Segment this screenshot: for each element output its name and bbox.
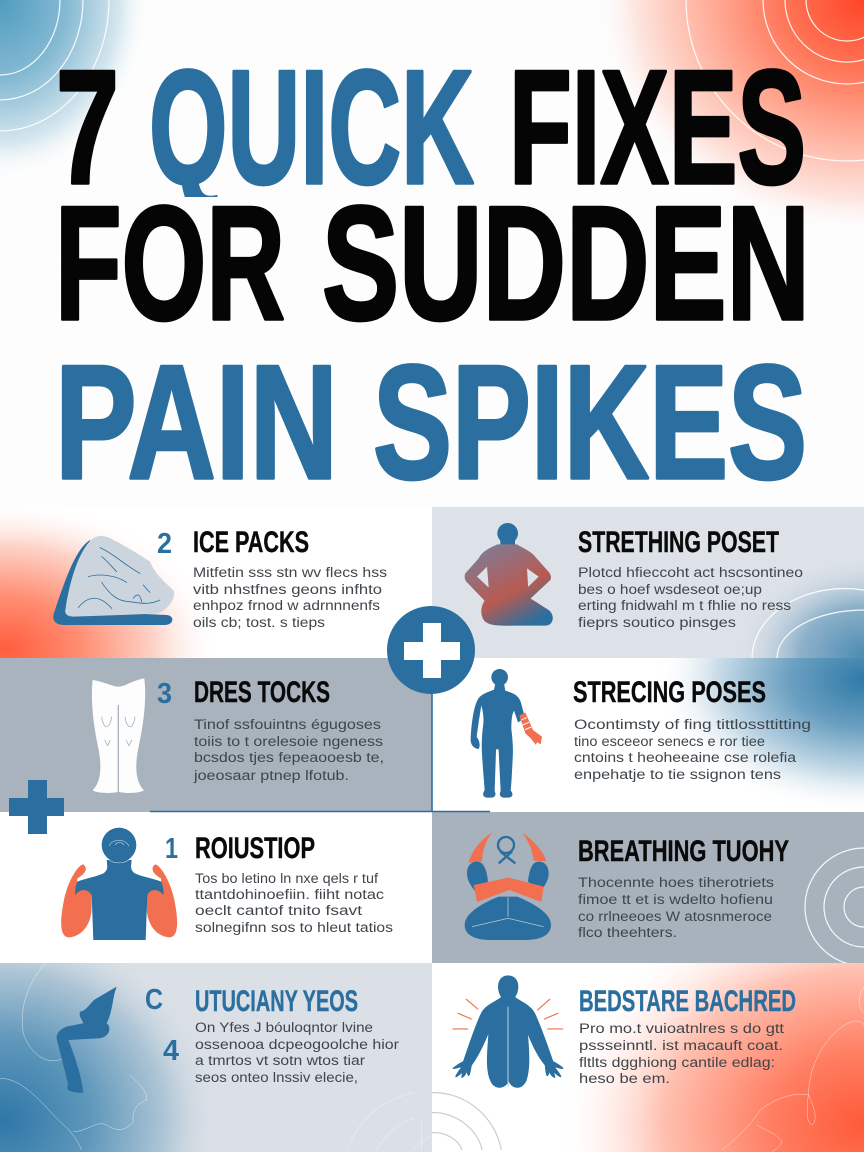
text block: Pro mo.t vuioatnlres s do gtt <box>579 1021 784 1036</box>
text block <box>578 565 803 630</box>
icon: small plus <box>9 780 64 834</box>
title: PAIN <box>55 332 338 513</box>
text block: ossenooa dcpeogoolche hior <box>195 1037 400 1052</box>
text block: cntoins t heoheeaine cse rolefia <box>574 750 797 765</box>
number: 1 <box>165 833 178 865</box>
number: 3 <box>157 678 172 710</box>
heading: ICE PACKS <box>193 526 309 559</box>
text block: Plotcd hfieccoht act hscsontineo <box>578 565 803 580</box>
panel: dres tocks <box>0 658 432 812</box>
panel: breathing tuohy <box>432 812 864 966</box>
icon: yoga pose <box>57 987 117 1093</box>
icon: breathing pose <box>465 833 551 940</box>
text block <box>195 871 393 935</box>
text block: flco theehters. <box>578 925 677 940</box>
text block <box>193 717 384 783</box>
icon: back with pain rays <box>453 976 563 1087</box>
text block: vitb nhstfnes geons infhto <box>193 582 382 597</box>
text block: Thocennte hoes tiherotriets <box>578 875 774 890</box>
icon: standing figure <box>471 669 542 798</box>
heading: ROIUSTIOP <box>195 832 315 865</box>
text block: oils cb; tost. s tieps <box>193 615 325 630</box>
heading: BREATHING TUOHY <box>578 835 789 868</box>
text block: fimoe tt et is wdelto hofienu <box>578 892 773 907</box>
corner glow: red top-right <box>580 0 864 240</box>
icon: ice pack <box>53 536 174 625</box>
text block: joeosaar ptnep lfotub. <box>193 768 349 783</box>
heading: STRECING POSES <box>573 676 766 709</box>
text block <box>195 1020 400 1085</box>
text block: toiis to t orelesoie ngeness <box>194 734 383 749</box>
text block: oeclt cantof tnito fsavt <box>195 903 362 918</box>
text block: solnegifnn sos to hleut tatios <box>195 920 393 935</box>
panel: strecing poses <box>432 658 864 812</box>
icon: seated figure <box>465 523 553 626</box>
panel: stretching poset <box>432 507 864 658</box>
text block <box>579 1021 784 1086</box>
icon: shoulders figure <box>61 828 177 940</box>
text block: pssseinntl. ist macauft coat. <box>579 1038 783 1053</box>
title: QUICK <box>149 37 474 218</box>
title: 7 <box>56 37 119 218</box>
panel: ice packs <box>0 507 432 658</box>
heading: DRES TOCKS <box>194 676 330 709</box>
title <box>60 68 804 482</box>
text block: enpehatje to tie ssignon tens <box>574 767 781 782</box>
heading: STRETHING POSET <box>578 526 779 559</box>
text block: Mitfetin sss stn wv flecs hss <box>193 565 387 580</box>
text block: Ocontimsty of fing tittlossttitting <box>574 717 811 732</box>
text block: erting fnidwahl m t fhlie no ress <box>578 598 791 613</box>
text block: bes o hoef wsdeseot oe;up <box>578 582 762 597</box>
text block: Tos bo letino ln nxe qels r tuf <box>195 871 378 886</box>
corner glow: blue top-left <box>0 0 170 185</box>
letter marker: C <box>145 984 163 1016</box>
text block: enhpoz frnod w adrnnnenfs <box>193 598 380 613</box>
number: 2 <box>157 528 172 560</box>
icon: legs <box>92 678 145 793</box>
panel: utuciany yeos <box>0 963 432 1152</box>
text block: On Yfes J bóuloqntor lvine <box>195 1020 373 1035</box>
heading: UTUCIANY YEOS <box>195 985 358 1018</box>
text block: fltlts dgghiong cantile edlag: <box>579 1055 775 1070</box>
text block: heso be em. <box>579 1071 670 1086</box>
number: 4 <box>163 1035 179 1067</box>
text block: a tmrtos vt sotn wtos tiar <box>195 1053 366 1068</box>
text block: fieprs soutico pinsges <box>578 615 736 630</box>
text block: tino esceeor senecs e ror tiee <box>574 734 765 749</box>
divider lines <box>150 658 490 812</box>
panel: roiustiop <box>0 812 432 963</box>
icon: plus badge <box>387 606 475 694</box>
text block: seos onteo lnssiv elecie, <box>195 1070 358 1085</box>
text block <box>578 875 774 940</box>
text block: ttantdohinoefiin. fiiht notac <box>195 887 384 902</box>
text block: Tinof ssfouintns égugoses <box>194 717 381 732</box>
text block <box>193 565 387 630</box>
text block: co rrlneeoes W atosnmeroce <box>578 909 772 924</box>
title: FOR <box>55 173 285 354</box>
text block: bcsdos tjes fepeaooesb te, <box>194 750 384 765</box>
text block <box>574 717 811 782</box>
panel: bedstare bachred <box>432 963 864 1152</box>
